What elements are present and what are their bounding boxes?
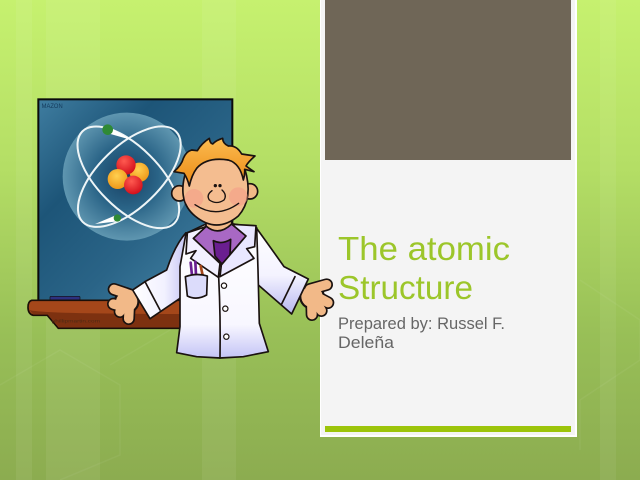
right sleeve <box>250 228 308 314</box>
chalk tray <box>28 296 193 328</box>
electron orbits <box>61 109 197 245</box>
subtitle text: Deleña <box>338 333 395 352</box>
left hand <box>113 289 139 319</box>
atom glow <box>63 113 191 241</box>
subtitle text: Prepared by: Russel F. <box>338 314 505 333</box>
pocket with pens <box>185 262 207 298</box>
head <box>183 159 248 225</box>
nucleus <box>108 155 149 194</box>
hair <box>174 138 255 186</box>
title text: Structure <box>338 269 473 306</box>
tray credit: phillipmartin.com <box>52 319 100 325</box>
shirt and tie <box>193 224 246 265</box>
coat body <box>177 224 268 358</box>
neck <box>206 215 232 231</box>
lapels <box>186 227 220 277</box>
eraser <box>50 296 80 301</box>
cheeks <box>185 189 203 208</box>
green accent bar <box>325 426 571 432</box>
subtitle text <box>338 314 505 352</box>
right hand <box>300 285 328 315</box>
title text <box>338 230 510 306</box>
title text: The atomic <box>338 230 510 267</box>
electrons <box>95 124 132 224</box>
ears <box>172 186 187 201</box>
face <box>195 185 239 212</box>
board signature: MAZON <box>42 104 63 110</box>
white title panel <box>320 0 577 437</box>
buttons <box>221 283 229 339</box>
scientist character <box>113 138 328 358</box>
left sleeve <box>133 233 186 319</box>
chalkboard with atom <box>38 99 232 303</box>
photo placeholder rectangle <box>325 0 571 160</box>
